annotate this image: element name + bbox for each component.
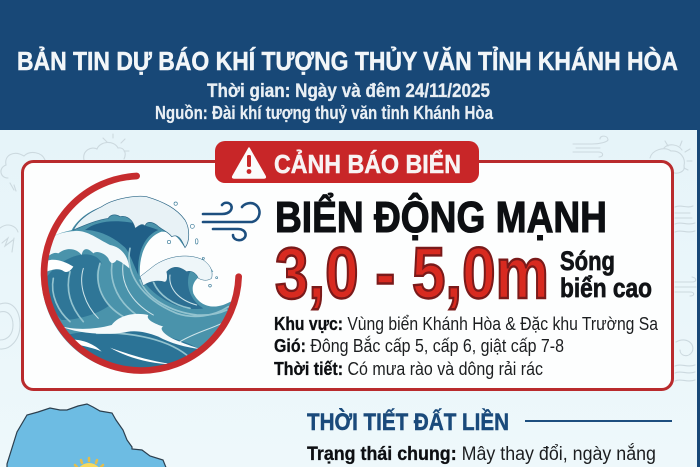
icon: wind	[203, 203, 259, 240]
wave body	[40, 196, 233, 374]
detail: wind: Gió: Đông Bắc cấp 5, cấp 6, giật cấp 7-8	[274, 335, 564, 356]
page background	[0, 130, 700, 467]
label: high waves: Sóng	[560, 246, 615, 276]
subtitle: time: Thời gian: Ngày và đêm 24/11/2025	[207, 80, 490, 102]
detail: area: Khu vực: Vùng biển Khánh Hòa & Đặc khu Trường Sa	[274, 314, 659, 334]
badge label: CẢNH BÁO BIỂN	[274, 149, 461, 179]
warning badge	[215, 141, 479, 183]
background weather icons	[0, 134, 696, 381]
big number: wave height: 3,0 - 5,0m	[275, 234, 549, 314]
foam far-left crest	[47, 260, 74, 272]
detail: weather: Thời tiết: Có mưa rào và dông rải rác	[274, 359, 543, 379]
heading: sea state: BIỂN ĐỘNG MẠNH	[275, 191, 607, 242]
icon: warning triangle	[233, 148, 265, 178]
subtitle: source: Nguồn: Đài khí tượng thuỷ văn tỉnh Khánh Hòa	[155, 103, 494, 123]
foam small crest	[140, 256, 212, 286]
foam lower crests	[58, 314, 200, 349]
red ring arc	[44, 176, 239, 371]
label: high waves: biển cao	[560, 273, 652, 303]
text block: inland summary: Trạng thái chung: Mây thay đổi, ngày nắng	[307, 443, 656, 465]
spray droplets	[167, 202, 218, 287]
icon: sun	[75, 458, 103, 467]
map: Khánh Hòa province	[7, 404, 167, 467]
water streaks	[53, 248, 228, 355]
panel: sea warning card	[22, 141, 672, 390]
foam left crest	[45, 231, 129, 268]
foam main crest	[73, 196, 189, 248]
heading: inland weather: THỜI TIẾT ĐẤT LIỀN	[307, 408, 509, 436]
label: high waves	[560, 246, 652, 303]
illustration: breaking wave	[40, 176, 239, 374]
